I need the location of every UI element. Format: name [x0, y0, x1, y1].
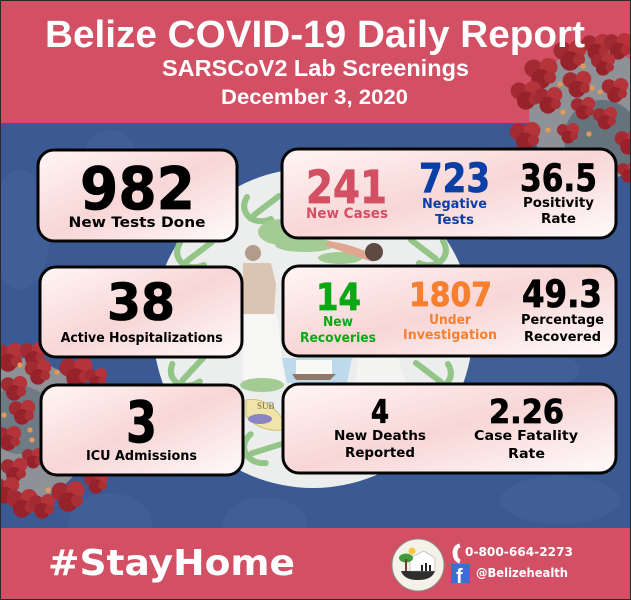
- stat: positivity rate: 36.5: [520, 157, 597, 200]
- facebook handle: @Belizehealth: [476, 566, 568, 580]
- background: faint cell shapes: [0, 130, 620, 557]
- stat: under investigation: 1807: [409, 275, 492, 314]
- hashtag: #StayHome: [48, 543, 295, 584]
- virus illustration: top right: [510, 33, 631, 182]
- stat: positivity rate: Positivity: [523, 195, 594, 211]
- stat: negative tests: [419, 156, 490, 228]
- stat: percentage recovered: Percentage: [521, 312, 604, 328]
- panel: ICU admissions: 3: [126, 390, 157, 456]
- icon: telephone: [453, 544, 460, 563]
- emblem: right figure: [356, 243, 406, 383]
- emblem: ground: [240, 378, 284, 392]
- stat: positivity rate: Rate: [541, 211, 576, 227]
- stat: negative tests: Tests: [435, 212, 474, 228]
- stat: case fatality rate: Rate: [508, 446, 545, 462]
- stat: new deaths: Reported: [345, 445, 415, 461]
- emblem: motto scroll: [246, 399, 282, 430]
- panel: active hospitalizations: [40, 267, 242, 357]
- stat: negative tests: Negative: [422, 196, 487, 212]
- panel: ICU admissions: [41, 385, 243, 475]
- stat: case fatality rate: [474, 392, 578, 462]
- emblem: branch: [325, 241, 378, 262]
- stat: new deaths: [334, 393, 426, 461]
- stat: new recoveries: [300, 276, 376, 346]
- bottom red banner: [0, 528, 631, 600]
- stat: new cases: 241: [306, 161, 387, 214]
- stat: new cases: New Cases: [306, 206, 388, 222]
- stat: case fatality rate: Case Fatality: [474, 428, 578, 444]
- stat: positivity rate: [520, 157, 597, 227]
- emblem: leaf wreath: [169, 196, 451, 471]
- stat: under investigation: [403, 275, 497, 343]
- stat: new recoveries: Recoveries: [300, 330, 376, 346]
- stat: new deaths: New Deaths: [334, 428, 426, 444]
- coat of arms: white circle with emblem: [153, 168, 473, 488]
- panel: active hospitalizations: 38: [107, 274, 175, 333]
- date: December 3, 2020: [221, 86, 408, 109]
- stat: new recoveries: New: [323, 314, 353, 330]
- panel: active hospitalizations: Active Hospitalizations: [61, 330, 223, 346]
- panel: new tests done: 982: [80, 154, 195, 223]
- panel: ICU admissions: ICU Admissions: [86, 448, 197, 464]
- subtitle: SARSCoV2 Lab Screenings: [162, 55, 469, 81]
- stat: under investigation: Under: [429, 312, 471, 328]
- icon: ministry of health seal: [392, 539, 444, 591]
- icon: facebook: f: [456, 566, 463, 588]
- emblem: left figure: [243, 245, 285, 382]
- emblem: shield with ship: [282, 358, 352, 383]
- panel: recoveries, under investigation, recovered: [283, 266, 616, 356]
- panel: cases, negative tests, positivity: [282, 149, 616, 238]
- stat: under investigation: Investigation: [403, 327, 497, 343]
- stat: percentage recovered: 49.3: [522, 273, 602, 316]
- emblem: mahogany tree canopy: [258, 219, 362, 264]
- stat: case fatality rate: 2.26: [489, 392, 564, 431]
- stat: new recoveries: 14: [316, 276, 361, 319]
- icon: facebook: [451, 564, 470, 588]
- top red banner: [0, 0, 631, 123]
- title: Belize COVID-19 Daily Report: [45, 14, 585, 56]
- phone number: 0-800-664-2273: [465, 544, 573, 559]
- panel: new tests done: New Tests Done: [68, 215, 206, 231]
- panel: new tests done: [38, 150, 237, 241]
- panel: deaths and fatality rate: [283, 384, 616, 473]
- stat: new deaths: 4: [371, 393, 389, 431]
- stat: percentage recovered: Recovered: [524, 329, 601, 345]
- emblem: motto scroll: SUB: [257, 401, 275, 411]
- stat: percentage recovered: [521, 273, 604, 345]
- virus illustration: bottom left: [0, 342, 108, 519]
- stat: negative tests: 723: [419, 156, 490, 202]
